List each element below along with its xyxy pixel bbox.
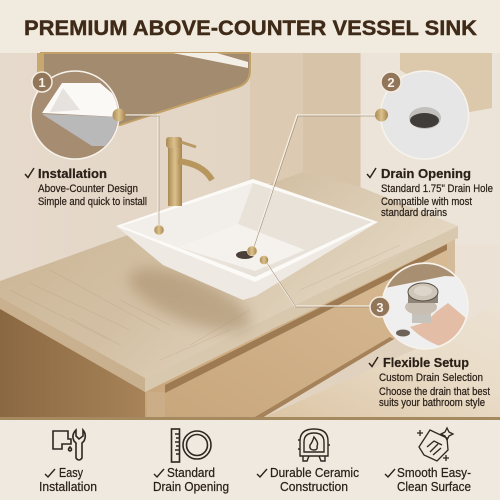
gold connector dot 1 [112,108,126,122]
label: durable ceramic construction: Durable Ceramic [270,466,359,480]
text: Flexible Setup: Flexible Setup [383,355,469,370]
badge 1: 1 [38,75,46,90]
mirror [37,53,250,125]
text: Flexible Setup: suits your bathroom style [379,397,485,409]
callout 3: pop-up drain in hand [370,263,468,349]
text: Drain Opening [367,166,493,219]
text: Drain Opening: Compatible with most [381,196,472,208]
cabinet left side [0,297,145,418]
label: standard drain opening [153,466,229,494]
title: PREMIUM ABOVE-COUNTER VESSEL SINK [24,16,477,40]
label: standard drain opening: Drain Opening [153,480,229,494]
gold connector dot 2 [375,108,388,122]
text: Installation: Above-Counter Design [38,183,138,195]
callout 2: drain detail [375,71,468,159]
icon: faucet and wrench [53,430,85,460]
right wall and floor [447,245,500,335]
text: Installation: Installation [38,166,107,181]
label: durable ceramic construction: Construction [280,480,348,494]
icon: ruler and circle [172,429,211,462]
callout leader lines [118,115,382,306]
faucet [166,137,212,206]
cabinet front [145,238,447,418]
callout 1: sink corner detail [31,71,126,159]
label: smooth easy-clean surface [385,466,471,494]
label: standard drain opening: Standard [167,466,215,480]
bathroom photo scene [0,53,500,418]
label: easy installation: Easy [59,466,84,480]
icon: kiln [298,429,330,461]
header band [0,0,500,53]
text: Drain Opening: standard drains [381,207,447,219]
text: Flexible Setup: Custom Drain Selection [379,372,483,384]
label: easy installation [39,466,97,494]
text: Installation [25,166,147,208]
text: Drain Opening: Drain Opening [381,166,471,181]
footer band [0,417,500,500]
label: smooth easy-clean surface: Smooth Easy- [397,466,471,480]
label: smooth easy-clean surface: Clean Surface [397,480,471,494]
anchor dots [154,225,268,264]
badge 2: 2 [387,75,395,90]
text: Installation: Simple and quick to install [38,196,147,208]
text: Flexible Setup [369,355,490,409]
badge 3: 3 [376,300,384,315]
vessel sink [116,179,378,300]
countertop [0,172,458,378]
label: durable ceramic construction [257,466,359,494]
label: easy installation: Installation [39,480,97,494]
icon: cloth with sparkles [417,428,453,461]
